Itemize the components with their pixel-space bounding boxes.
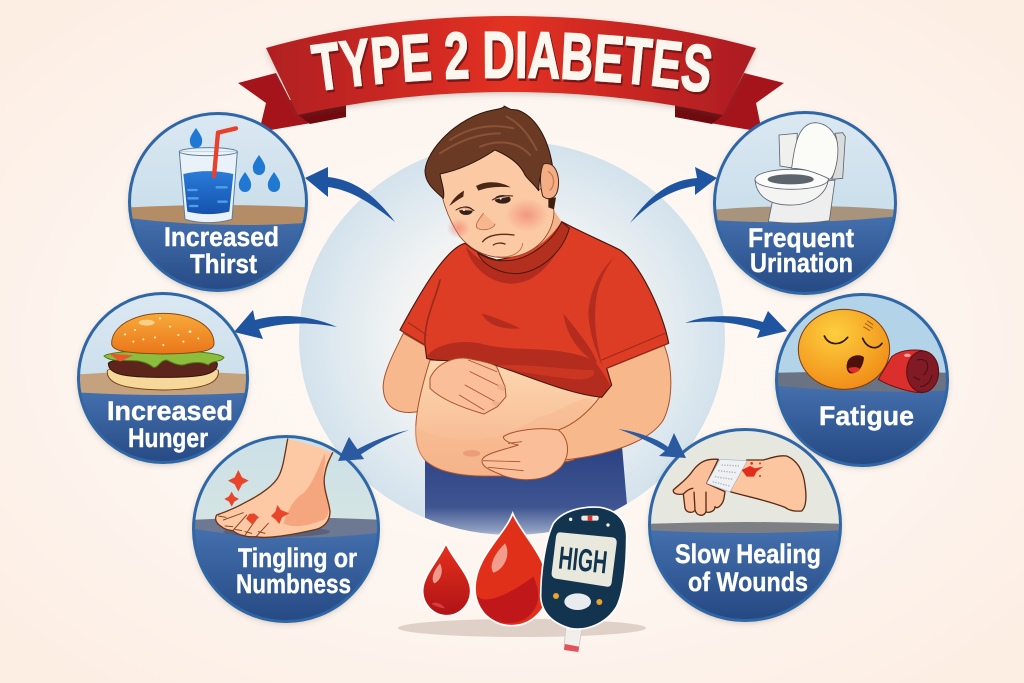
viewer-left arm	[383, 333, 440, 412]
arrow: to frequent urination	[630, 167, 717, 223]
icon: wounded arm	[673, 456, 806, 515]
arrow: to tingling head overlay	[338, 437, 364, 461]
label: Fatigue	[819, 401, 914, 431]
eyes	[456, 195, 513, 215]
arrow: to increased hunger	[234, 310, 337, 339]
banner ribbon	[266, 16, 756, 115]
ring	[130, 114, 306, 290]
label: Tingling or	[238, 543, 357, 573]
hair strands	[440, 117, 537, 155]
infographic canvas	[76, 16, 950, 652]
arrow: to slow healing	[618, 429, 686, 458]
arrow: to increased thirst	[305, 167, 395, 222]
lower hand	[482, 429, 568, 480]
ring	[714, 112, 896, 294]
viewer-right arm	[558, 343, 671, 460]
circle face	[193, 436, 379, 622]
hair	[425, 106, 552, 198]
nose	[476, 213, 495, 230]
trousers	[425, 446, 630, 540]
finger lines	[683, 488, 706, 512]
icon: bandage	[707, 459, 747, 492]
chin	[497, 243, 523, 257]
collar	[478, 222, 569, 274]
banner folds	[298, 104, 723, 124]
ground shadow	[398, 619, 646, 637]
icon: large blood drop	[475, 513, 548, 626]
label line 2: Urination	[750, 248, 853, 278]
meter screen	[552, 532, 617, 587]
panel: increased hunger	[70, 293, 260, 470]
ring	[776, 294, 948, 466]
meter button	[564, 593, 591, 610]
forearm	[727, 456, 806, 511]
arrow: to tingling	[338, 430, 409, 461]
blood drops and glucose meter	[423, 507, 627, 652]
panel: tingling or numbness	[190, 436, 385, 630]
panel: frequent urination	[710, 112, 900, 300]
panel: increased thirst	[120, 113, 320, 300]
central halo circle	[299, 141, 725, 535]
circle face	[776, 294, 948, 466]
icon: red limb	[878, 350, 939, 393]
banner right tail	[675, 73, 784, 132]
title banner	[238, 16, 784, 130]
panel: fatigue	[770, 294, 955, 470]
label line 2: of Wounds	[688, 567, 808, 597]
panel: slow healing of wounds	[645, 429, 845, 625]
meter strip	[564, 617, 583, 652]
circle face	[714, 112, 896, 294]
label line 2: Numbness	[236, 569, 351, 599]
label: Slow Healing	[675, 539, 821, 569]
label line 2: Hunger	[128, 423, 208, 453]
banner left tail	[238, 73, 346, 132]
person	[383, 106, 671, 540]
figure details	[383, 106, 671, 480]
ground and label band	[131, 205, 305, 289]
meter body	[541, 507, 627, 629]
cheeks	[447, 198, 548, 238]
circle face	[129, 113, 307, 291]
meter indicators	[553, 516, 610, 605]
label: Increased	[164, 222, 279, 252]
ear	[540, 163, 559, 199]
eyebrows	[449, 182, 511, 206]
upper hand	[430, 358, 506, 414]
face	[439, 148, 554, 258]
icon: wound	[742, 462, 763, 477]
circle face	[78, 293, 248, 463]
label line 2: Thirst	[190, 249, 257, 279]
ring	[650, 430, 840, 620]
ground and label band	[195, 518, 377, 620]
icon: toilet	[755, 123, 845, 223]
icon: tingling sparks	[224, 470, 289, 525]
label: Frequent	[748, 223, 854, 253]
navel	[463, 450, 480, 457]
arrow: to fatigue	[685, 311, 787, 338]
ground and label band	[778, 372, 946, 464]
circle face	[649, 429, 841, 621]
ground and label band	[651, 522, 839, 619]
mouth	[483, 234, 514, 245]
label: Increased	[107, 396, 233, 426]
ring	[194, 436, 378, 622]
icon: tired emoji	[798, 309, 890, 389]
hand	[673, 459, 725, 515]
icon: glass of water	[179, 128, 237, 223]
meter reading: HIGH	[557, 540, 609, 580]
ring	[78, 294, 248, 462]
neck	[477, 200, 562, 257]
icon: water drops	[190, 128, 280, 192]
title text: TYPE 2 DIABETES	[310, 31, 713, 94]
icon: small blood drop	[423, 543, 471, 616]
icon: foot	[216, 439, 333, 537]
belly shade	[415, 399, 593, 475]
ground and label band	[716, 206, 894, 292]
shirt	[400, 222, 669, 397]
nape hair	[548, 197, 556, 209]
ground and label band	[80, 372, 246, 461]
belly	[416, 360, 620, 476]
icon: burger	[104, 313, 224, 390]
